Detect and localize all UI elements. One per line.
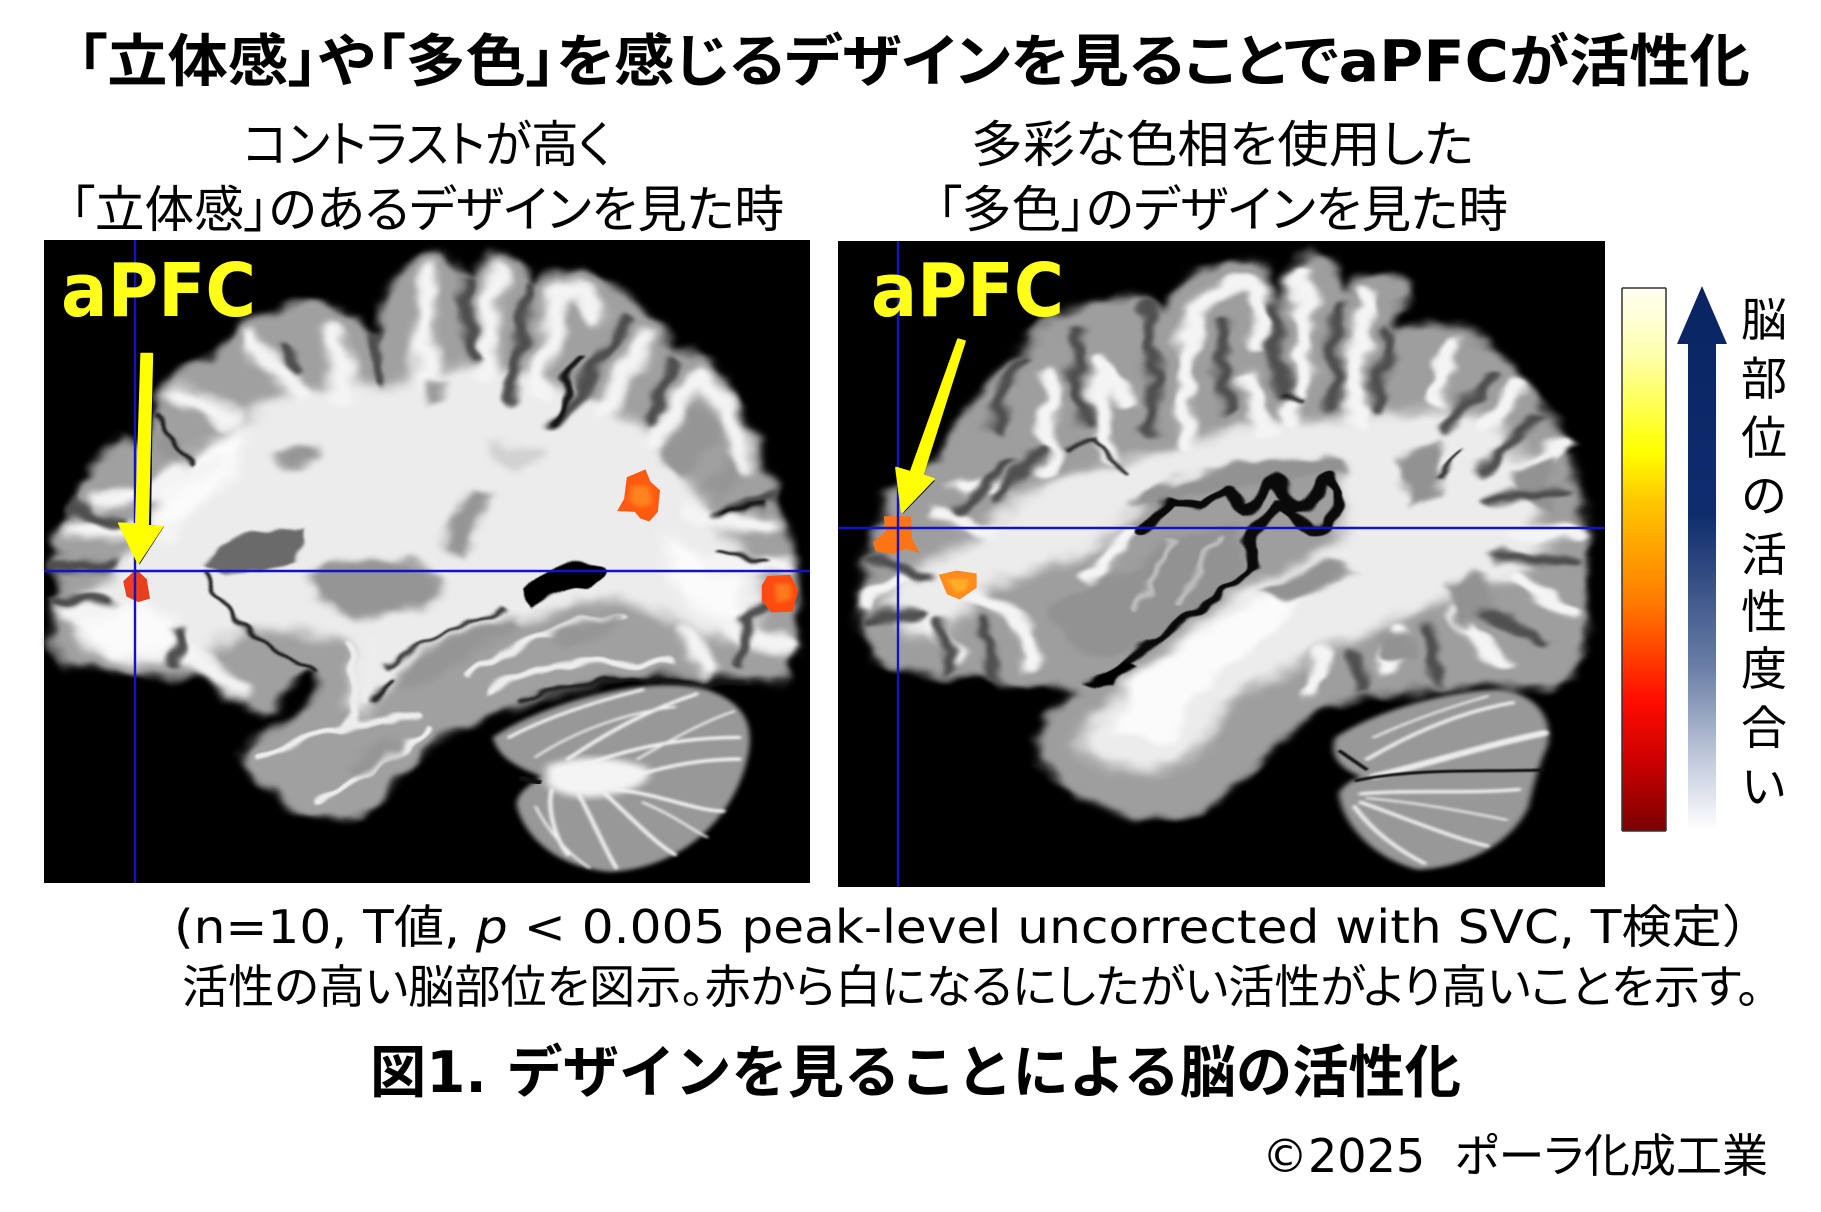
subtitle: left condition (70, 105, 784, 242)
subtitle: right condition: 「多色」のデザインを見た時 (937, 170, 1508, 242)
brain: left cortex (48, 252, 799, 820)
brain: right cortex (860, 254, 1591, 819)
activation: left clusters (123, 469, 798, 613)
copyright: ©2025 ポーラ化成工業 (1262, 1129, 1768, 1183)
arrow: right aPFC pointer (896, 339, 965, 514)
subtitle: left condition: 「立体感」のあるデザインを見た時 (70, 170, 784, 242)
arrow: activation scale up (1677, 286, 1727, 831)
axis label: brain activation level: 位 (1741, 402, 1787, 468)
axis label: brain activation level: 合 (1741, 692, 1787, 758)
axis label: brain activation level: の (1741, 460, 1787, 526)
title: 「立体感」や「多色」を感じるデザインを見ることでaPFCが活性化 (77, 29, 1750, 95)
subtitle: right condition: 多彩な色相を使用した (971, 105, 1474, 177)
panel: right brain scan (838, 241, 1605, 887)
activation: right clusters (873, 516, 977, 600)
figure caption: 図1. デザインを見ることによる脳の活性化 (370, 1040, 1461, 1106)
statistics note: (n=10, T値, p < 0.005 peak-level uncorrected with SVC, T検定） (174, 900, 1772, 954)
label: aPFC right: aPFC (871, 248, 1064, 334)
brain: right cerebellum (1333, 690, 1549, 870)
color scale bar (1622, 288, 1666, 831)
brain: left cerebellum (493, 685, 750, 872)
explanation note: 活性の高い脳部位を図示。赤から白になるにしたがい活性がより高いことを示す。 (182, 951, 1760, 1017)
arrow: left aPFC pointer (119, 354, 164, 565)
axis label: brain activation level: 度 (1741, 633, 1787, 699)
axis label: brain activation level (1741, 284, 1787, 817)
panel: left brain scan (44, 240, 810, 883)
axis label: brain activation level: 活 (1741, 519, 1787, 585)
subtitle: right condition (937, 105, 1508, 242)
subtitle: left condition: コントラストが高く (243, 105, 611, 177)
label: aPFC left: aPFC (61, 248, 256, 334)
axis label: brain activation level: い (1741, 751, 1787, 817)
crosshair: right (838, 241, 1605, 887)
crosshair: left (44, 240, 810, 883)
axis label: brain activation level: 部 (1741, 343, 1787, 409)
axis label: brain activation level: 脳 (1741, 284, 1787, 350)
axis label: brain activation level: 性 (1741, 576, 1787, 642)
